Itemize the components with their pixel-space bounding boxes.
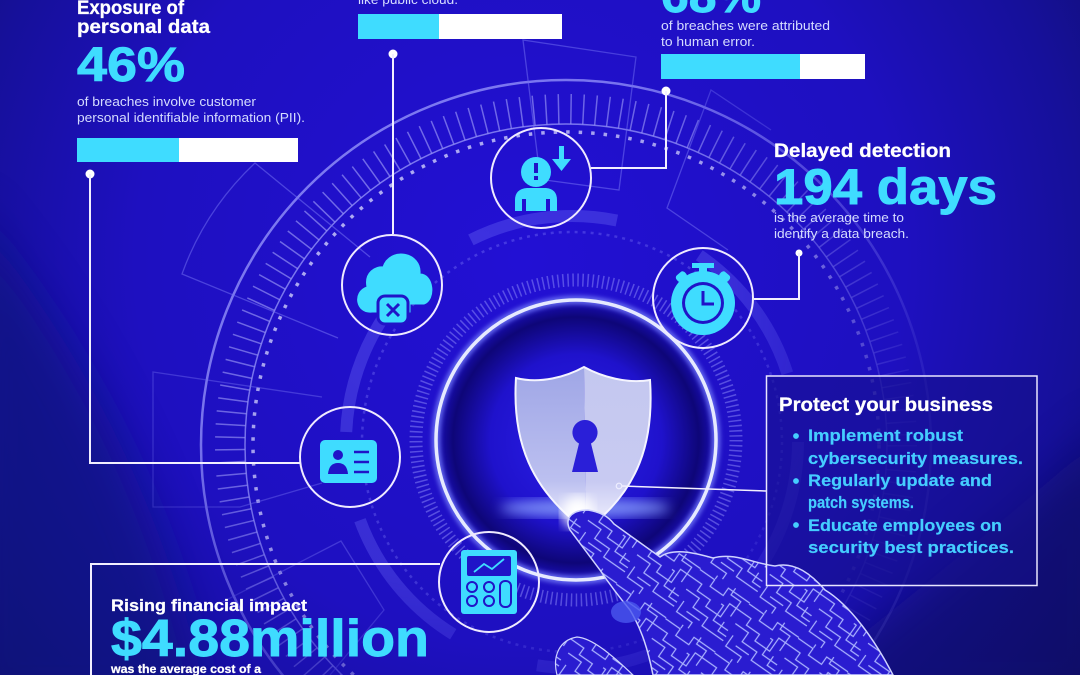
panel: rising financial impact: $4.88million [111, 610, 429, 668]
panel: exposure of personal data: personal identifiable information (PII). [77, 111, 305, 125]
connector: human error [591, 86, 670, 168]
protection list: Regularly update and [808, 471, 992, 490]
connector: shield to protect box [616, 483, 766, 491]
icon: calculator [439, 532, 539, 632]
icon: cloud with x [342, 235, 442, 335]
icon: person alert [491, 128, 591, 228]
panel: exposure of personal data: 46% [77, 39, 185, 92]
panel: exposure of personal data: personal data [77, 17, 210, 38]
connector: detection [754, 250, 802, 299]
panel: delayed detection: is the average time to [774, 211, 904, 225]
panel: exposure of personal data [77, 0, 305, 162]
panel: rising financial impact: Rising financial impact [111, 597, 308, 615]
panel: human error [661, 0, 865, 79]
panel: exposure of personal data: of breaches involve customer [77, 95, 256, 109]
icon: stopwatch [653, 248, 753, 348]
connector: cloud [388, 50, 398, 234]
panel: delayed detection: identify a data breach. [774, 227, 909, 241]
icon: id card [300, 407, 400, 507]
protection list [793, 426, 1023, 557]
hand [556, 510, 893, 675]
protection list: security best practices. [808, 538, 1014, 557]
panel: human error: of breaches were attributed [661, 19, 830, 33]
shield with keyhole [515, 367, 651, 530]
panel: public cloud [358, 0, 562, 39]
panel fill: protect box [766, 376, 1037, 586]
technology rings [153, 40, 931, 675]
protection list: patch systems. [808, 493, 914, 512]
protection list: Educate employees on [808, 516, 1002, 535]
protection list: cybersecurity measures. [808, 449, 1023, 468]
progress bar 68% [661, 54, 865, 79]
progress bar 46% [77, 138, 298, 162]
progress bar cloud [358, 14, 562, 39]
central lens [416, 280, 736, 600]
panel: protect your business: Protect your business [779, 395, 993, 416]
panel: protect your business [766, 376, 1037, 586]
connector: PII [86, 170, 301, 463]
panel: delayed detection: Delayed detection [774, 141, 951, 162]
panel: rising financial impact [91, 564, 440, 675]
panel: delayed detection [774, 141, 997, 241]
panel: delayed detection: 194 days [774, 159, 997, 215]
protection list: Implement robust [808, 426, 963, 445]
panel: human error: to human error. [661, 35, 755, 49]
